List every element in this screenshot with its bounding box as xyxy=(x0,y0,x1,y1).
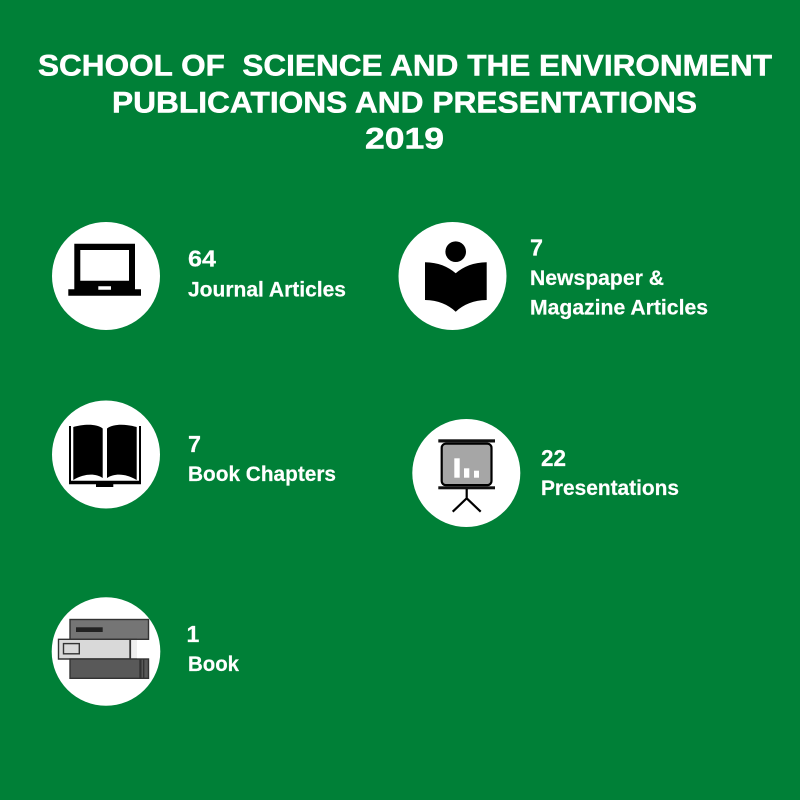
stat: book xyxy=(186,621,239,676)
stat: book chapters xyxy=(188,431,336,486)
stat: book chapters: Book Chapters xyxy=(188,463,336,486)
title xyxy=(38,50,772,156)
stat: journal articles: Journal Articles xyxy=(188,278,346,302)
icon: open book xyxy=(52,400,160,508)
title: SCHOOL OF SCIENCE AND THE ENVIRONMENT xyxy=(38,50,772,82)
title: PUBLICATIONS AND PRESENTATIONS xyxy=(112,86,697,120)
icon: presentation screen xyxy=(412,419,520,527)
title: 2019 xyxy=(365,122,444,156)
stat: newspaper and magazine articles: Magazine Articles xyxy=(530,296,708,320)
stat: journal articles xyxy=(188,246,346,302)
icon: person reading xyxy=(398,222,506,330)
stat: newspaper and magazine articles: 7 xyxy=(530,234,543,260)
stat: newspaper and magazine articles xyxy=(530,234,708,320)
icon: stack of books xyxy=(52,597,160,706)
stat: book: Book xyxy=(188,653,239,676)
stat: book: 1 xyxy=(186,621,200,647)
icon: laptop xyxy=(52,222,160,330)
stat: presentations: 22 xyxy=(541,445,566,471)
stat: presentations xyxy=(541,445,679,500)
stat: journal articles: 64 xyxy=(188,246,216,272)
stat: newspaper and magazine articles: Newspaper & xyxy=(530,267,664,290)
stat: presentations: Presentations xyxy=(541,477,679,500)
stat: book chapters: 7 xyxy=(188,431,201,457)
